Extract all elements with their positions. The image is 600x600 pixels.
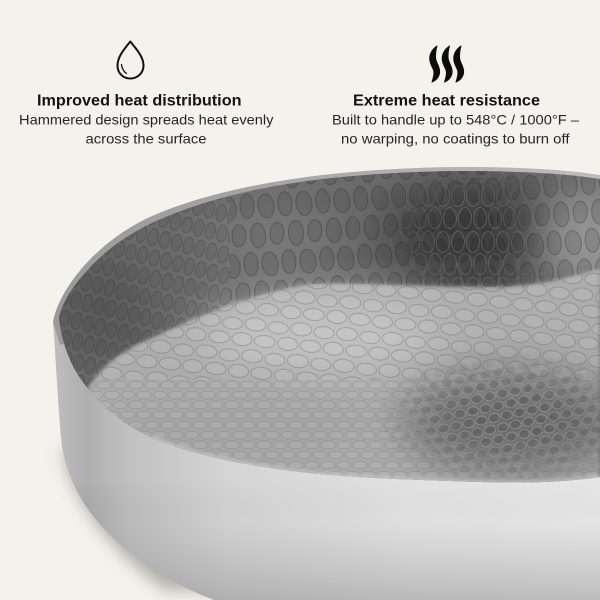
wall hammer pattern (60, 171, 600, 386)
icon: heat waves (430, 46, 464, 82)
pan cast shadow (56, 446, 210, 599)
floor hammer pattern (80, 265, 600, 490)
description line 2: across the surface (86, 130, 207, 146)
description line 2: no warping, no coatings to burn off (341, 130, 570, 146)
icon: water drop (118, 42, 144, 78)
heading: improved heat distribution: Improved heat distribution (37, 92, 242, 110)
interior wall tone (59, 171, 600, 482)
interior floor tone (85, 268, 600, 490)
text block: improved heat distribution (19, 92, 274, 146)
floor front edge highlight (150, 437, 600, 482)
frying pan (40, 160, 600, 600)
heading: extreme heat resistance: Extreme heat resistance (353, 92, 540, 110)
description line 1: Built to handle up to 548°C / 1000°F – (332, 112, 579, 128)
pan outer body and rim (53, 167, 600, 600)
pan hammered interior (59, 171, 600, 482)
description line 1: Hammered design spreads heat evenly (19, 112, 274, 128)
text block: extreme heat resistance (332, 92, 579, 146)
